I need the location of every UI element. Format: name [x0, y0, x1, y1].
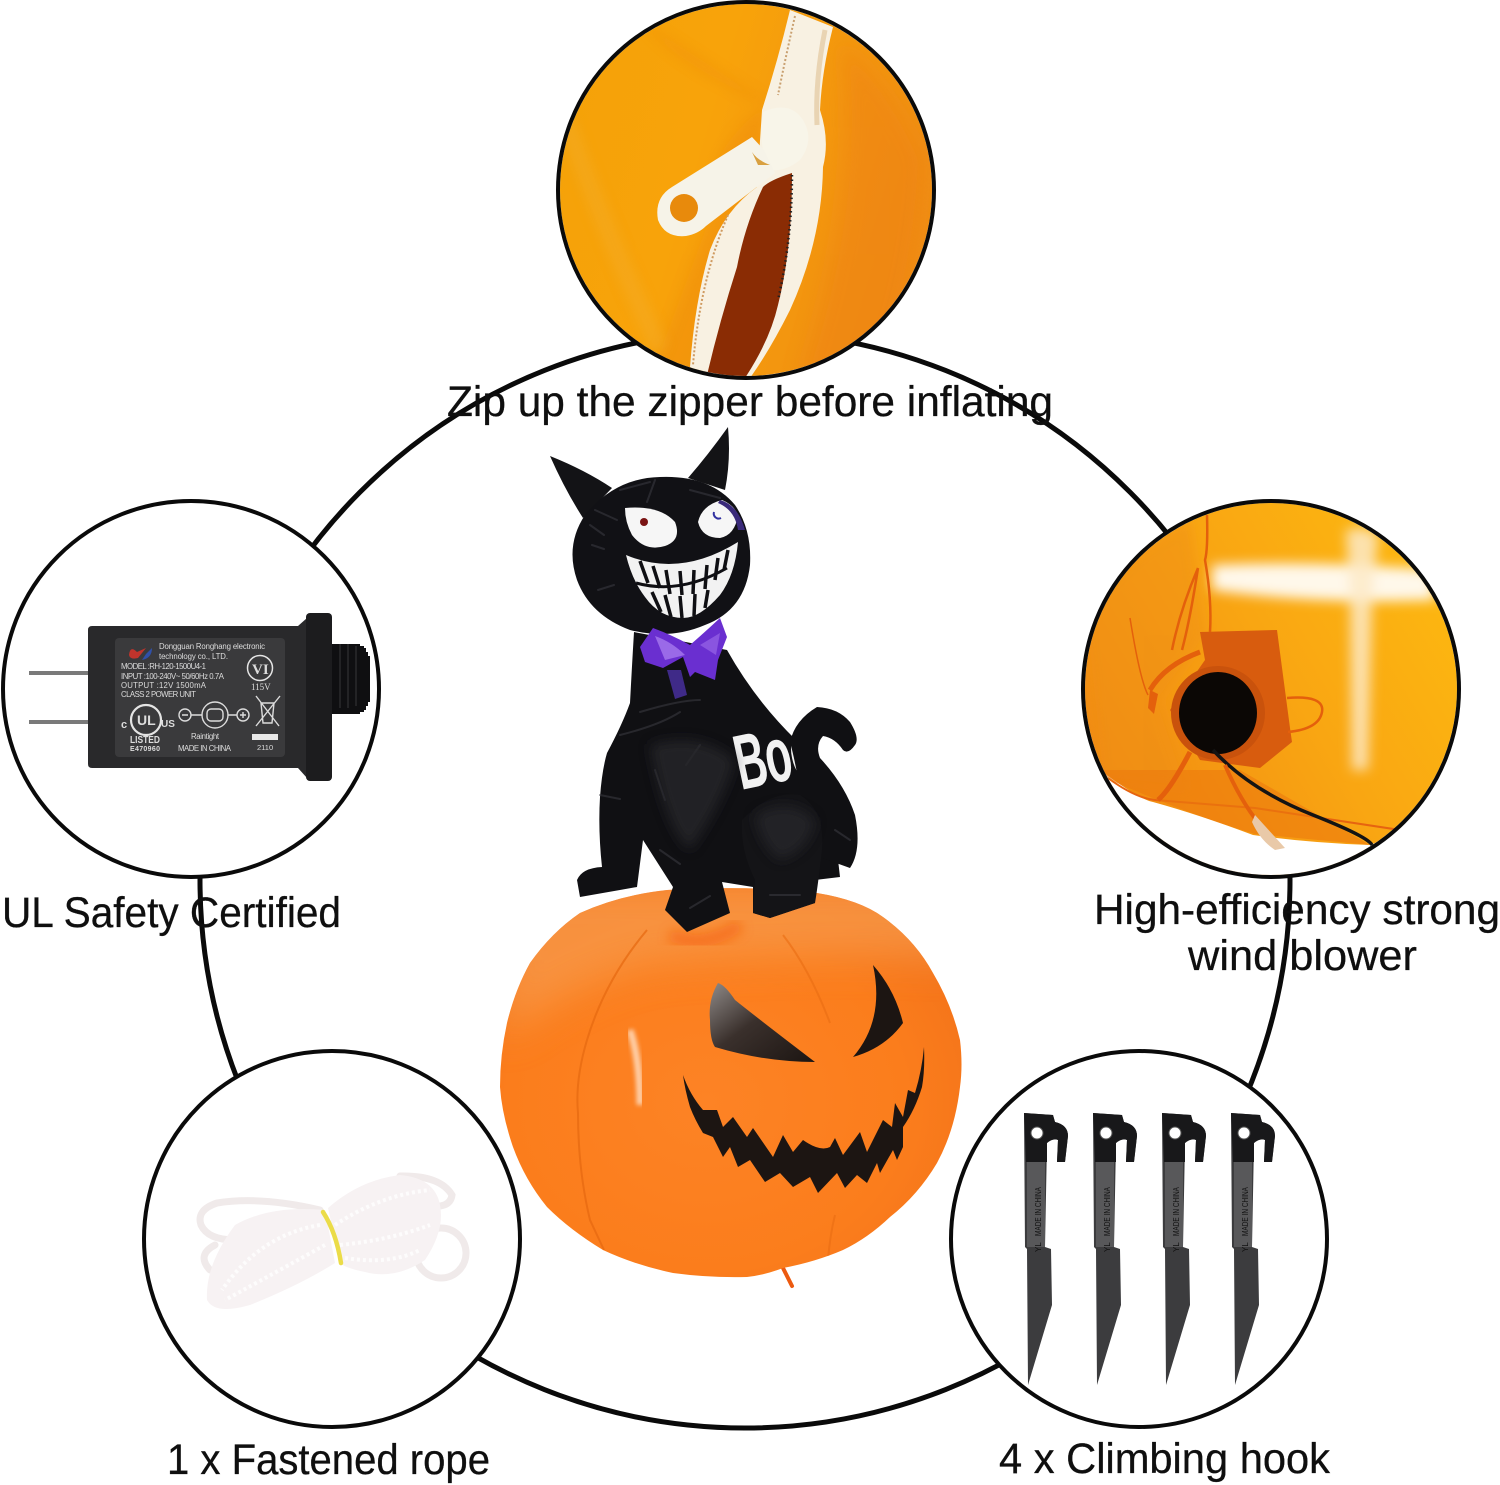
- cat bow: [640, 618, 727, 699]
- adapter body: UL: [137, 712, 156, 728]
- caption: blower: High-efficiency strong: [1094, 886, 1500, 934]
- panel: blower: [1083, 501, 1465, 880]
- icon: hook 1: MADE IN CHINA: [1034, 1186, 1043, 1236]
- icon: hook 3: MADE IN CHINA: [1172, 1186, 1181, 1236]
- cat hip: [742, 794, 822, 918]
- white ground below fabric: [1106, 774, 1376, 875]
- icon: plug prongs: [29, 671, 89, 724]
- dark patch: [1170, 630, 1292, 768]
- caption: rope: 1 x Fastened rope: [167, 1436, 490, 1484]
- icon: hook 2: MADE IN CHINA: [1103, 1186, 1112, 1236]
- icon: hook 3: [1162, 1113, 1206, 1385]
- adapter body: Dongguan Ronghang electronic: [159, 642, 265, 651]
- adapter body: INPUT :100-240V~ 50/60Hz 0.7A: [121, 672, 225, 681]
- mouth: [683, 1047, 924, 1193]
- central inflatable: pumpkin: [500, 880, 970, 1286]
- icon: hook 1: YL: [1034, 1242, 1043, 1252]
- icon: hook 4: [1231, 1113, 1275, 1385]
- caption: hooks: 4 x Climbing hook: [999, 1435, 1330, 1483]
- caption: UL safety: UL Safety Certified: [2, 889, 341, 937]
- adapter body: OUTPUT :12V 1500mA: [121, 681, 207, 690]
- adapter body: 115V: [251, 682, 271, 692]
- icon: hook 4: MADE IN CHINA: [1241, 1186, 1250, 1236]
- adapter body: US: [161, 719, 175, 730]
- panel: rope: [144, 1051, 520, 1427]
- adapter body: MODEL :RH-120-1500U4-1: [121, 662, 206, 671]
- right eye: [853, 965, 903, 1057]
- light reflection: [1212, 528, 1436, 770]
- icon: hook 3: YL: [1172, 1242, 1181, 1252]
- caption: zipper: Zip up the zipper before inflating: [447, 378, 1053, 426]
- central inflatable: black cat: [550, 427, 858, 932]
- caption: blower: wind blower: [1187, 932, 1417, 980]
- cat ears: [550, 427, 729, 518]
- icon: hook 2: YL: [1103, 1242, 1112, 1252]
- cat head: [572, 477, 750, 634]
- adapter body: c: [121, 719, 127, 731]
- large connecting ring: [200, 332, 1290, 1428]
- zipper tape: [690, 10, 833, 378]
- left eye: [710, 983, 815, 1062]
- adapter body: 2110: [257, 743, 273, 752]
- adapter body: CLASS 2 POWER UNIT: [121, 690, 196, 699]
- icon: rope coil: [200, 1175, 466, 1309]
- adapter body: [88, 613, 370, 781]
- icon: hook 1: [1024, 1113, 1068, 1385]
- icon: hook 2: [1093, 1113, 1137, 1385]
- zipper opening: [707, 173, 792, 378]
- icon: zipper pull: [657, 137, 770, 236]
- adapter body: technology co., LTD.: [159, 652, 228, 661]
- cat grin: [626, 542, 738, 618]
- cat tail: [790, 707, 858, 868]
- icon: hook 4: YL: [1241, 1242, 1250, 1252]
- fabric highlights: [590, 480, 850, 908]
- icon: blower opening: [1179, 672, 1257, 754]
- panel: zipper: [556, 0, 936, 380]
- caption: blower: [1094, 886, 1500, 980]
- Boo lettering: Boo: [727, 705, 823, 807]
- panel: power adapter: [3, 501, 379, 877]
- adapter body: LISTED: [130, 735, 160, 746]
- cat eyes: [625, 508, 677, 548]
- adapter body: Raintight: [191, 732, 220, 741]
- adapter body: MADE IN CHINA: [178, 744, 232, 753]
- panel: climbing hooks: [951, 1051, 1327, 1427]
- cat body: [577, 632, 840, 932]
- adapter body: E470960: [130, 746, 160, 753]
- adapter body: VI: [252, 662, 269, 678]
